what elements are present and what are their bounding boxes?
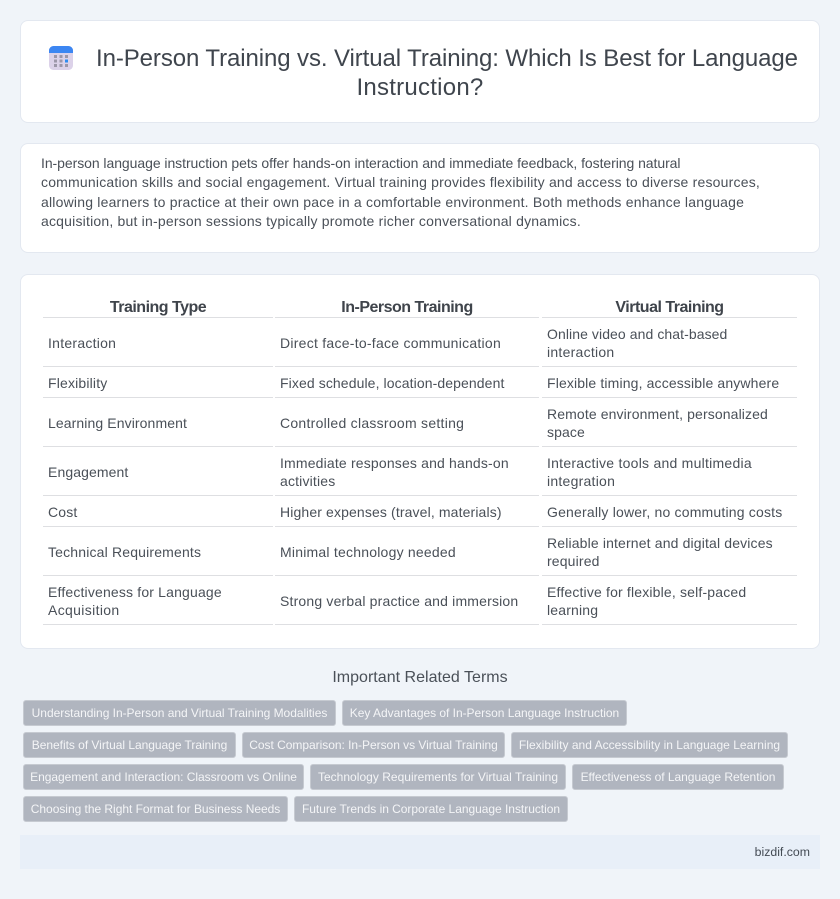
heading: related terms: Important Related Terms — [332, 669, 508, 686]
comparison table — [43, 297, 797, 626]
cell: engagement virtual — [547, 455, 752, 489]
cell: technical virtual: required — [547, 553, 600, 569]
tag — [572, 764, 784, 790]
cell: technical in-person: Minimal technology needed — [280, 544, 456, 560]
intro text: allowing learners to practice at their own pace in a comfortable environment. Both methods enhance language — [41, 194, 744, 210]
cell: engagement virtual: integration — [547, 473, 615, 489]
cell: technical virtual: Reliable internet and digital devices — [547, 535, 773, 551]
tag — [23, 700, 336, 726]
row: effectiveness — [48, 584, 222, 618]
cell: flexibility in-person: Fixed schedule, location-dependent — [280, 375, 504, 391]
column header: virtual: Virtual Training — [615, 299, 724, 316]
intro text: acquisition, but in-person sessions typically promote richer conversational dynamics. — [41, 213, 581, 229]
column header: in-person: In-Person Training — [341, 299, 473, 316]
cell: flexibility virtual: Flexible timing, accessible anywhere — [547, 375, 779, 391]
cell: effectiveness virtual: Effective for flexible, self-paced — [547, 584, 746, 600]
cell: engagement virtual: Interactive tools and multimedia — [547, 455, 752, 471]
tag — [310, 764, 566, 790]
tag: Effectiveness of Language Retention — [581, 770, 775, 784]
row: effectiveness: Effectiveness for Language — [48, 584, 222, 600]
title: Instruction? — [356, 74, 484, 101]
cell: environment virtual: space — [547, 424, 585, 440]
cell: environment virtual: Remote environment, personalized — [547, 406, 768, 422]
cell: cost virtual: Generally lower, no commuting costs — [547, 504, 782, 520]
cell: engagement in-person: activities — [280, 473, 335, 489]
tag — [242, 732, 505, 758]
tag: Engagement and Interaction: Classroom vs Online — [30, 770, 297, 784]
tag: Future Trends in Corporate Language Instruction — [302, 802, 560, 816]
tag — [23, 732, 236, 758]
row: flexibility: Flexibility — [48, 375, 107, 391]
tag: Choosing the Right Format for Business Needs — [31, 802, 280, 816]
cell: engagement in-person — [280, 455, 509, 489]
cell: interaction virtual: Online video and chat-based — [547, 326, 727, 342]
row: cost: Cost — [48, 504, 77, 520]
tag — [511, 732, 788, 758]
panel: comparison table card — [20, 274, 820, 649]
row: engagement: Engagement — [48, 464, 128, 480]
cell: cost in-person: Higher expenses (travel, materials) — [280, 504, 502, 520]
row: interaction: Interaction — [48, 335, 116, 351]
tag — [23, 764, 304, 790]
tag: Flexibility and Accessibility in Language Learning — [519, 738, 780, 752]
tag: Cost Comparison: In-Person vs Virtual Training — [249, 738, 498, 752]
row: technical requirements: Technical Requirements — [48, 544, 201, 560]
tag — [23, 796, 288, 822]
intro text: In-person language instruction pets offer hands-on interaction and immediate feedback, fostering natural — [41, 154, 680, 170]
tag — [342, 700, 627, 726]
intro text — [41, 154, 760, 229]
cell: interaction virtual: interaction — [547, 344, 614, 360]
tag: Technology Requirements for Virtual Training — [318, 770, 558, 784]
cell: environment in-person: Controlled classroom setting — [280, 415, 464, 431]
title — [96, 45, 798, 101]
cell: environment virtual — [547, 406, 768, 440]
icon: calendar — [49, 46, 73, 70]
row: effectiveness: Acquisition — [48, 602, 120, 618]
tag: Benefits of Virtual Language Training — [32, 738, 227, 752]
row: learning environment: Learning Environment — [48, 415, 187, 431]
cell: interaction in-person: Direct face-to-face communication — [280, 335, 501, 351]
cell: engagement in-person: Immediate responses and hands-on — [280, 455, 509, 471]
intro text: communication skills and social engagement. Virtual training provides flexibility and access to diverse resources, — [41, 174, 760, 190]
cell: effectiveness virtual — [547, 584, 746, 618]
tag: Key Advantages of In-Person Language Instruction — [350, 706, 619, 720]
footer bar — [20, 835, 820, 869]
cell: interaction virtual — [547, 326, 727, 360]
column header: training type: Training Type — [110, 299, 206, 316]
tag: Understanding In-Person and Virtual Training Modalities — [32, 706, 327, 720]
panel: intro card — [20, 143, 820, 253]
cell: effectiveness in-person: Strong verbal practice and immersion — [280, 593, 518, 609]
tag — [294, 796, 568, 822]
footer text: bizdif.com — [755, 845, 810, 859]
cell: effectiveness virtual: learning — [547, 602, 598, 618]
cell: technical virtual — [547, 535, 773, 569]
panel: header card — [20, 20, 820, 123]
title: In-Person Training vs. Virtual Training: Which Is Best for Language — [96, 45, 798, 72]
